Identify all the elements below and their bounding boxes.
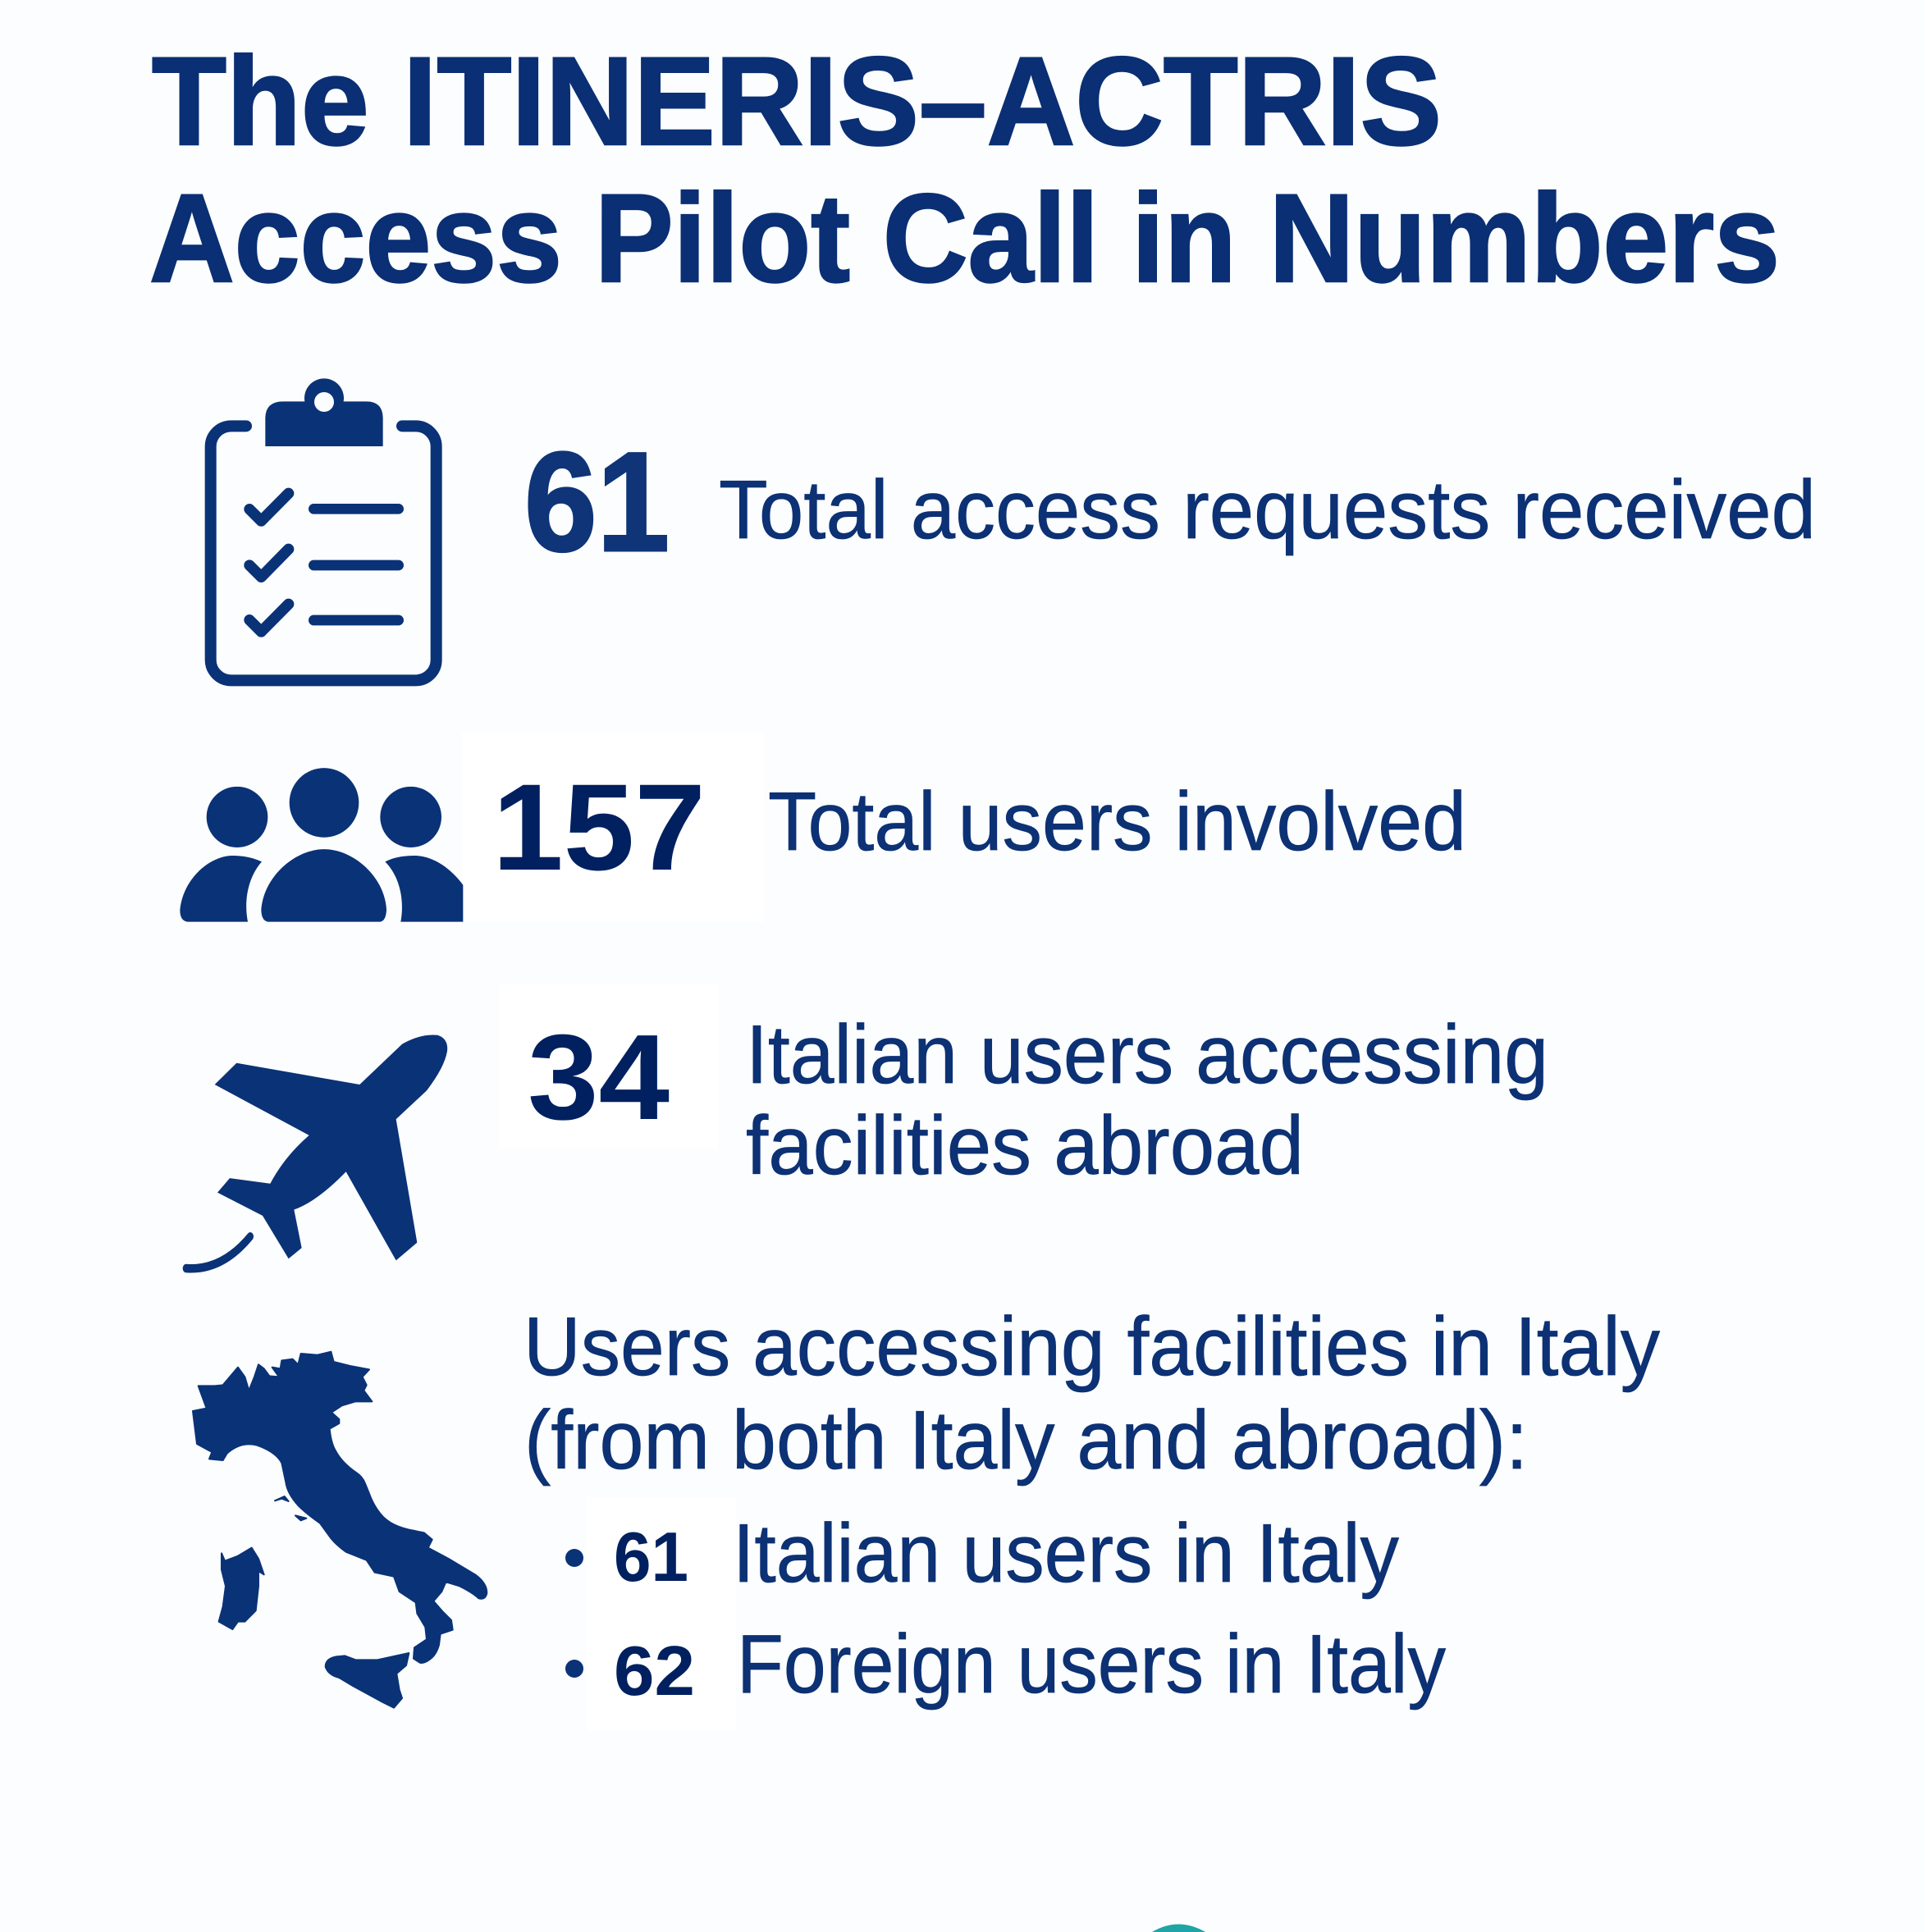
list item: 61 italian users: 61 <box>614 1519 688 1596</box>
panel: users accessing facilities in italy <box>193 1301 1660 1731</box>
heading: users accessing facilities in italy <box>524 1301 1660 1487</box>
panel: total users <box>180 733 1466 922</box>
title <box>149 31 1780 308</box>
title: Access Pilot Call in Numbers <box>149 168 1780 308</box>
icon: clipboard checklist <box>211 378 437 680</box>
label: total access requests received: Total access requests received <box>719 464 1816 556</box>
label: italian users accessing facilities abroad <box>746 1009 1548 1192</box>
number background patch <box>587 1497 736 1731</box>
title: The ITINERIS–ACTRIS <box>152 31 1442 171</box>
heading: users accessing facilities in italy: Users accessing facilities in Italy <box>524 1301 1660 1393</box>
icon: airplane <box>186 1035 447 1268</box>
cropped teal logo arc <box>1152 1925 1205 1932</box>
number: 61: 61 <box>524 423 670 581</box>
list item: 62 foreign users: Foreign users in Italy <box>737 1619 1446 1710</box>
number background patch <box>462 733 764 922</box>
number: 34: 34 <box>528 1010 670 1145</box>
panel: italian users abroad <box>186 984 1548 1268</box>
list item: 62 foreign users: 62 <box>614 1633 695 1710</box>
icon: group of people <box>180 768 463 922</box>
number background patch <box>499 984 718 1149</box>
heading: users accessing facilities in italy: (from both Italy and abroad): <box>524 1395 1528 1487</box>
panel: total access requests <box>211 378 1816 680</box>
label: italian users accessing facilities abroad: facilities abroad <box>746 1100 1304 1192</box>
label: italian users accessing facilities abroad: Italian users accessing <box>746 1009 1548 1101</box>
list item: 61 italian users: Italian users in Italy <box>733 1508 1399 1600</box>
label: total users involved: Total users involved <box>768 776 1466 868</box>
number: 157: 157 <box>492 758 706 896</box>
icon: map of italy <box>193 1352 487 1708</box>
